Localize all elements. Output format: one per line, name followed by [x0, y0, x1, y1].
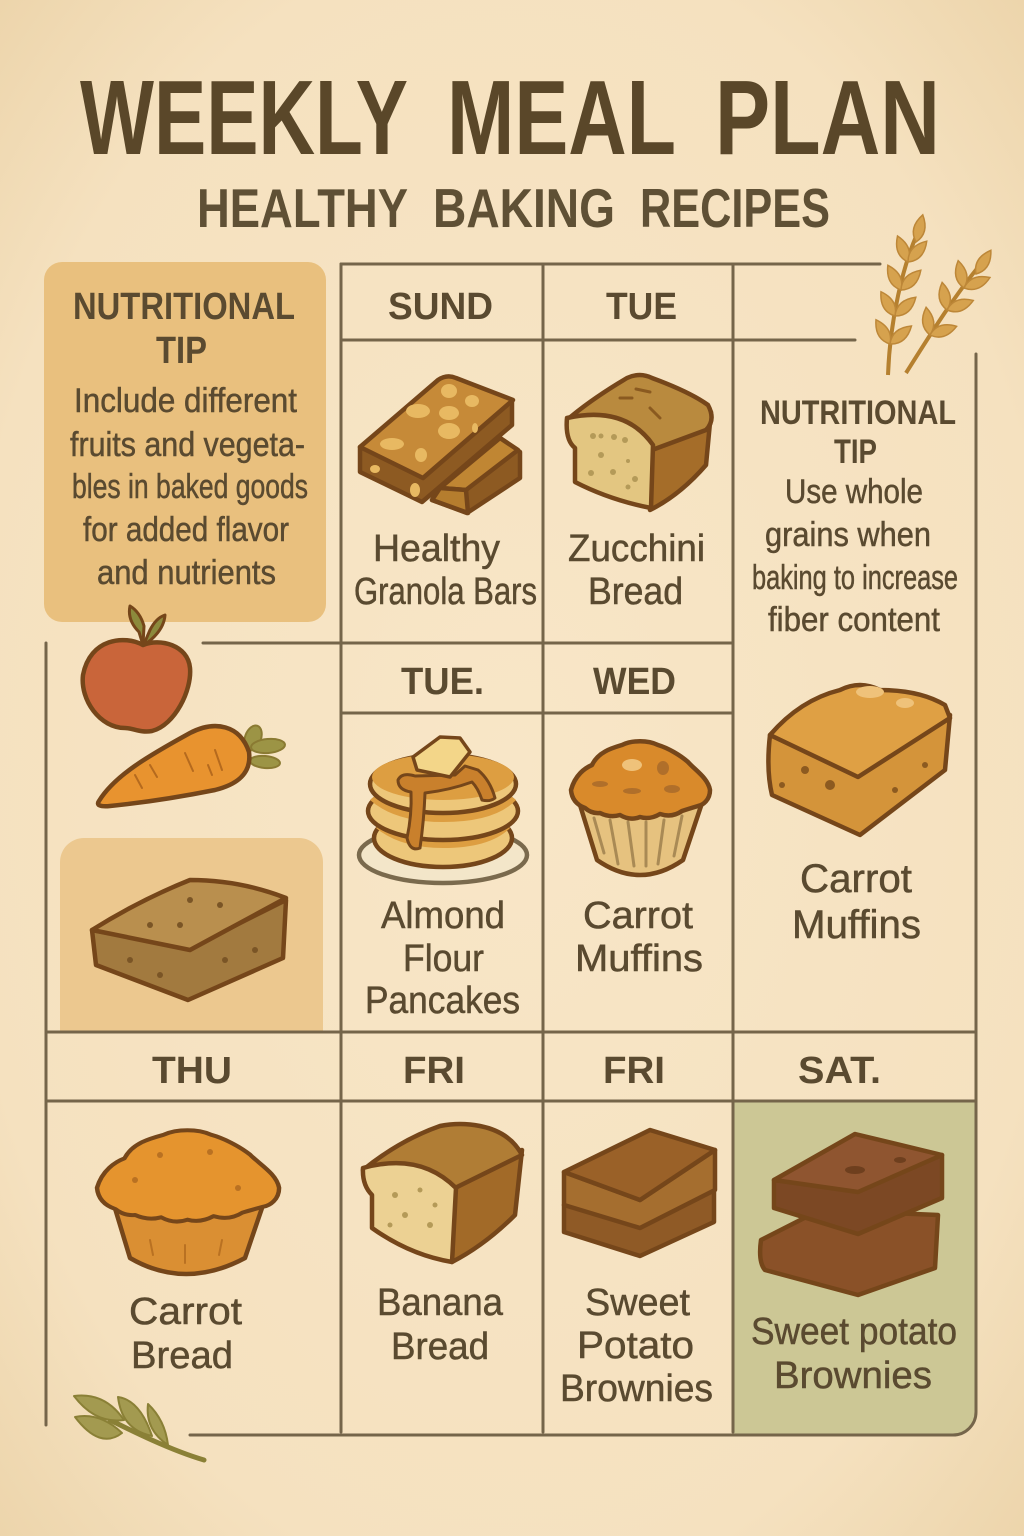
panel: nutritional tip left: and nutrients	[97, 554, 276, 592]
text: almond flour pancakes: Flour	[403, 938, 484, 980]
title: PLAN	[715, 59, 940, 177]
text: sweet potato brownies: Sweet	[585, 1282, 690, 1324]
subtitle: HEALTHY	[197, 177, 408, 239]
text: carrot bread: Carrot	[129, 1291, 242, 1333]
text: carrot muffins right: Carrot	[800, 857, 912, 901]
panel: nutritional tip left: TIP	[156, 330, 207, 372]
day labels: SAT.	[798, 1050, 881, 1092]
text: carrot bread: Bread	[131, 1335, 233, 1377]
subtitle: RECIPES	[640, 177, 830, 239]
panel: nutritional tip left: fruits and vegeta-	[70, 426, 305, 464]
title: WEEKLY	[80, 59, 408, 177]
text: banana bread: Bread	[391, 1326, 489, 1368]
text: carrot muffins middle	[575, 895, 703, 980]
day labels: SUND	[388, 286, 493, 328]
day labels: TUE.	[401, 661, 484, 703]
panel: bread swatch	[60, 838, 323, 1031]
day labels: FRI	[603, 1050, 665, 1092]
text: sweet potato brownies: Potato	[577, 1325, 694, 1367]
text: banana bread	[377, 1282, 504, 1368]
title: MEAL	[447, 59, 676, 177]
panel: nutritional tip left	[44, 262, 326, 622]
text: sweet potato brownies saturday	[751, 1311, 957, 1397]
icon: carrot bread muffin	[97, 1130, 279, 1274]
icon: carrot cake loaf	[768, 685, 950, 835]
icon: apple	[83, 606, 190, 731]
panel: nutritional tip right: TIP	[834, 433, 877, 471]
text: sweet potato brownies saturday: Sweet potato	[751, 1311, 957, 1353]
text: carrot muffins middle: Carrot	[583, 895, 693, 937]
text: zucchini bread: Zucchini	[568, 528, 705, 570]
text: zucchini bread: Bread	[588, 571, 683, 613]
subtitle	[197, 177, 830, 239]
text: carrot muffins right: Muffins	[792, 903, 921, 947]
text: sweet potato brownies saturday: Brownies	[774, 1355, 932, 1397]
panel: nutritional tip right	[752, 394, 958, 639]
panel: nutritional tip left: bles in baked goods	[72, 468, 308, 506]
subtitle: BAKING	[433, 177, 615, 239]
icon: muffin	[571, 741, 710, 875]
icon: banana bread loaf	[363, 1124, 522, 1262]
panel: nutritional tip left: NUTRITIONAL	[73, 286, 295, 328]
icon: saturday brownies	[760, 1134, 942, 1295]
panel: nutritional tip left: Include different	[74, 382, 298, 420]
icon: granola bars	[360, 376, 520, 513]
text: healthy granola bars: Granola Bars	[354, 571, 537, 613]
panel: green saturday cell	[734, 1102, 976, 1435]
text: zucchini bread	[568, 528, 705, 613]
day labels	[152, 286, 881, 1092]
icon: pancakes	[359, 737, 527, 883]
text: sweet potato brownies	[560, 1282, 713, 1410]
meal calendar grid	[46, 264, 976, 1435]
text: carrot muffins middle: Muffins	[575, 938, 703, 980]
panel: nutritional tip left: for added flavor	[83, 511, 289, 549]
text: banana bread: Banana	[377, 1282, 504, 1324]
text: almond flour pancakes: Almond	[381, 895, 505, 937]
panel: nutritional tip right: grains when	[765, 516, 931, 554]
icon: carrot	[98, 723, 286, 806]
icon: sweet potato brownies stack	[564, 1130, 715, 1256]
icon: wheat	[871, 214, 996, 375]
text: almond flour pancakes	[365, 895, 520, 1022]
panel: nutritional tip right: fiber content	[768, 601, 941, 639]
title	[80, 59, 940, 177]
text: healthy granola bars: Healthy	[373, 528, 500, 570]
day labels: THU	[152, 1050, 232, 1092]
text: carrot bread	[129, 1291, 242, 1377]
day labels: FRI	[403, 1050, 465, 1092]
day labels: WED	[593, 661, 676, 703]
icon: olive leaves	[74, 1396, 204, 1460]
panel: nutritional tip right: NUTRITIONAL	[760, 394, 956, 432]
text: healthy granola bars	[354, 528, 537, 613]
day labels: TUE	[606, 286, 677, 328]
text: carrot muffins right	[792, 857, 921, 947]
panel: nutritional tip right: Use whole	[785, 473, 923, 511]
panel: nutritional tip right: baking to increase	[752, 559, 958, 597]
icon: zucchini bread loaf	[567, 375, 712, 510]
icon: bread on swatch	[92, 880, 286, 1000]
text: almond flour pancakes: Pancakes	[365, 980, 520, 1022]
text: sweet potato brownies: Brownies	[560, 1368, 713, 1410]
